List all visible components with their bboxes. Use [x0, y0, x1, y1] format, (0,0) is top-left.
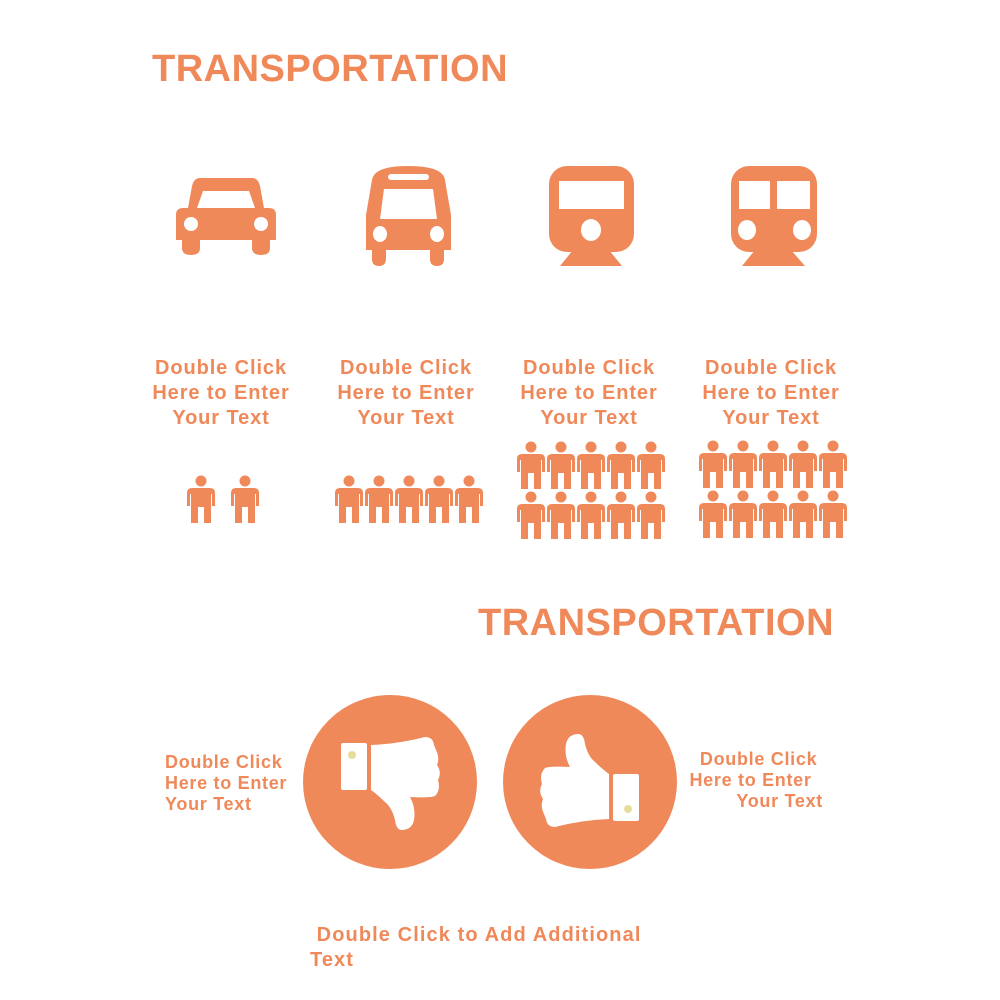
- label: train: Here to Enter: [702, 382, 840, 404]
- text: bottom additional: Text: [310, 949, 354, 971]
- label: car: Double Click: [155, 357, 287, 379]
- icon: bus: [366, 166, 451, 266]
- title: second: TRANSPORTATION: [478, 602, 834, 644]
- label: car: [152, 357, 290, 429]
- title: top: TRANSPORTATION: [152, 48, 508, 90]
- label: bus: Here to Enter: [337, 382, 475, 404]
- label: bus: Your Text: [357, 407, 455, 429]
- label: tram: [520, 357, 658, 429]
- icon: thumbs down: [303, 695, 477, 869]
- label: car: Here to Enter: [152, 382, 290, 404]
- people group: 10 a: [517, 442, 665, 539]
- text: left of thumbs down: Your Text: [165, 794, 252, 814]
- people group: 5: [335, 476, 483, 523]
- text: bottom additional: Double Click to Add Additional: [317, 924, 642, 946]
- text: right of thumbs up: Double Click: [700, 749, 817, 769]
- label: train: Double Click: [705, 357, 837, 379]
- text: right of thumbs up: [689, 749, 823, 811]
- people group: 2: [187, 476, 259, 523]
- text: right of thumbs up: Your Text: [736, 791, 823, 811]
- text: left of thumbs down: Here to Enter: [165, 773, 287, 793]
- people group: 10 b: [699, 440, 847, 538]
- icon: car: [176, 178, 276, 255]
- label: tram: Double Click: [523, 357, 655, 379]
- text: right of thumbs up: Here to Enter: [689, 770, 812, 790]
- label: tram: Your Text: [540, 407, 638, 429]
- icon: tram: [549, 166, 634, 266]
- label: bus: [337, 357, 475, 429]
- label: car: Your Text: [172, 407, 270, 429]
- text: left of thumbs down: [165, 752, 287, 814]
- icon: thumbs up: [503, 695, 677, 869]
- text: bottom additional: [310, 924, 642, 971]
- icon: train: [731, 166, 817, 266]
- label: train: Your Text: [722, 407, 820, 429]
- label: train: [702, 357, 840, 429]
- text: left of thumbs down: Double Click: [165, 752, 282, 772]
- label: bus: Double Click: [340, 357, 472, 379]
- label: tram: Here to Enter: [520, 382, 658, 404]
